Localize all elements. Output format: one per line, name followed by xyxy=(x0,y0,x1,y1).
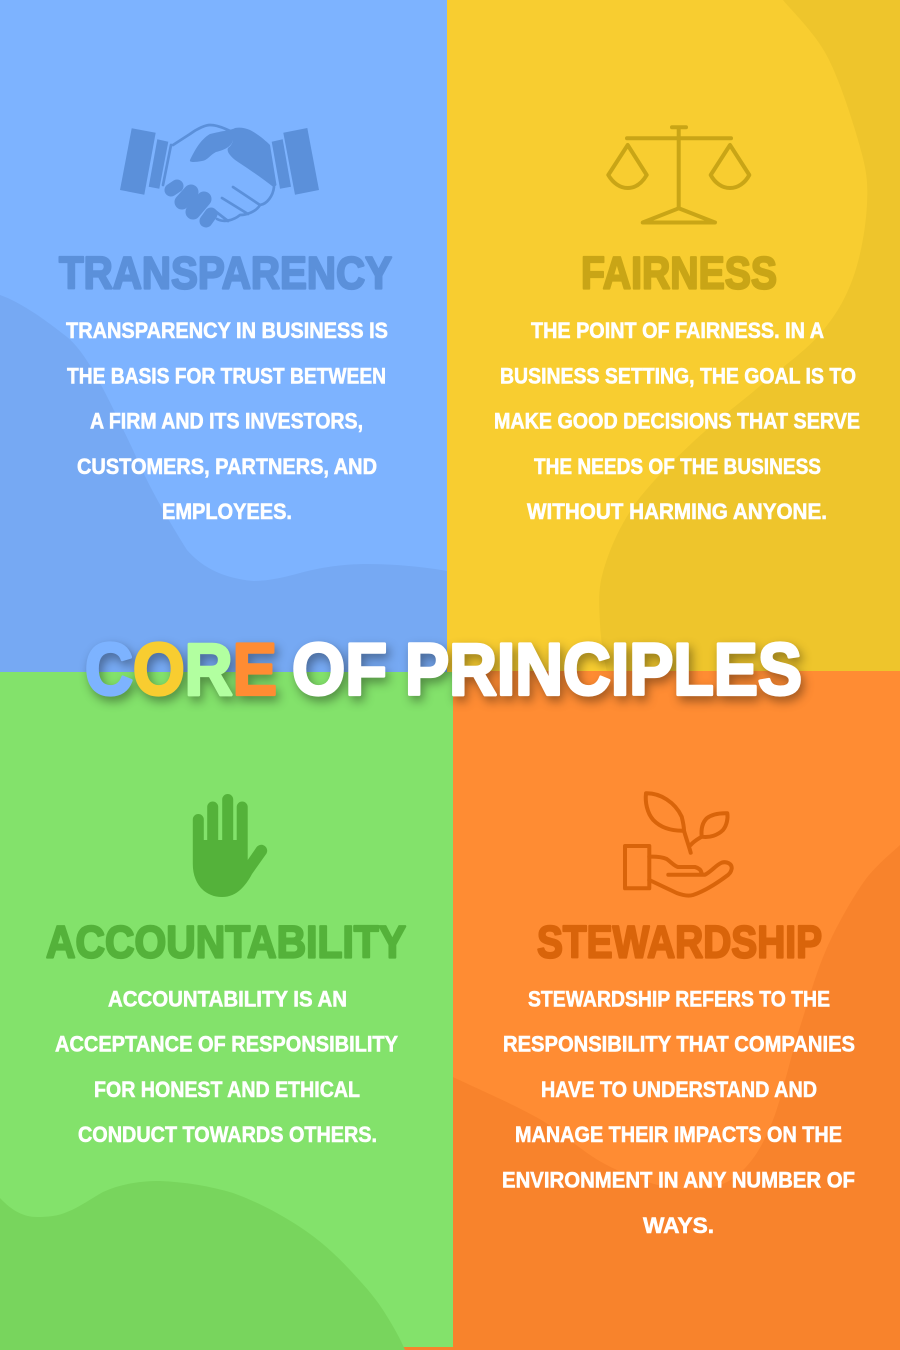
panel: transparency xyxy=(0,0,447,672)
text block: stewardship: STEWARDSHIP REFERS TO THE xyxy=(528,986,830,1011)
icon: plant in hand xyxy=(625,793,732,896)
text block: accountability xyxy=(55,986,398,1147)
heading: stewardship: STEWARDSHIP xyxy=(537,916,822,968)
heading: accountability: ACCOUNTABILITY xyxy=(46,916,406,968)
panel: stewardship xyxy=(453,671,900,1350)
text block: fairness: BUSINESS SETTING, THE GOAL IS TO xyxy=(500,363,856,388)
heading: fairness: FAIRNESS xyxy=(581,248,777,298)
text block: fairness: WITHOUT HARMING ANYONE. xyxy=(527,499,827,524)
title: CORE xyxy=(85,630,277,710)
text block: accountability: FOR HONEST AND ETHICAL xyxy=(94,1077,360,1102)
text block: fairness: THE POINT OF FAIRNESS. IN A xyxy=(531,318,824,343)
text block: fairness: THE NEEDS OF THE BUSINESS xyxy=(534,454,821,479)
title xyxy=(85,630,802,710)
text block: stewardship: ENVIRONMENT IN ANY NUMBER OF xyxy=(502,1168,855,1192)
panel: fairness xyxy=(447,0,900,672)
text block: fairness: MAKE GOOD DECISIONS THAT SERVE xyxy=(494,409,860,434)
text block: stewardship xyxy=(502,986,855,1238)
panel: accountability xyxy=(0,672,453,1350)
text block: accountability: CONDUCT TOWARDS OTHERS. xyxy=(78,1122,377,1147)
text block: transparency: THE BASIS FOR TRUST BETWEEN xyxy=(67,363,386,388)
heading: transparency: TRANSPARENCY xyxy=(59,248,392,298)
text block: stewardship: HAVE TO UNDERSTAND AND xyxy=(541,1077,817,1102)
icon: handshake xyxy=(120,125,319,221)
title: OF xyxy=(292,630,387,710)
text block: stewardship: RESPONSIBILITY THAT COMPANIES xyxy=(503,1032,855,1057)
text block: transparency xyxy=(66,318,388,524)
text block: fairness xyxy=(494,318,860,524)
text block: transparency: TRANSPARENCY IN BUSINESS IS xyxy=(66,318,388,343)
text block: transparency: EMPLOYEES. xyxy=(162,499,292,524)
icon: balance scale xyxy=(608,127,749,222)
text block: accountability: ACCOUNTABILITY IS AN xyxy=(108,986,347,1011)
text block: transparency: CUSTOMERS, PARTNERS, AND xyxy=(77,454,377,479)
icon: raised hand xyxy=(193,794,267,897)
text block: accountability: ACCEPTANCE OF RESPONSIBILITY xyxy=(55,1032,398,1057)
text block: transparency: A FIRM AND ITS INVESTORS, xyxy=(90,409,363,434)
text block: stewardship: WAYS. xyxy=(643,1213,714,1238)
title: PRINCIPLES xyxy=(405,630,802,710)
text block: stewardship: MANAGE THEIR IMPACTS ON THE xyxy=(515,1122,842,1147)
